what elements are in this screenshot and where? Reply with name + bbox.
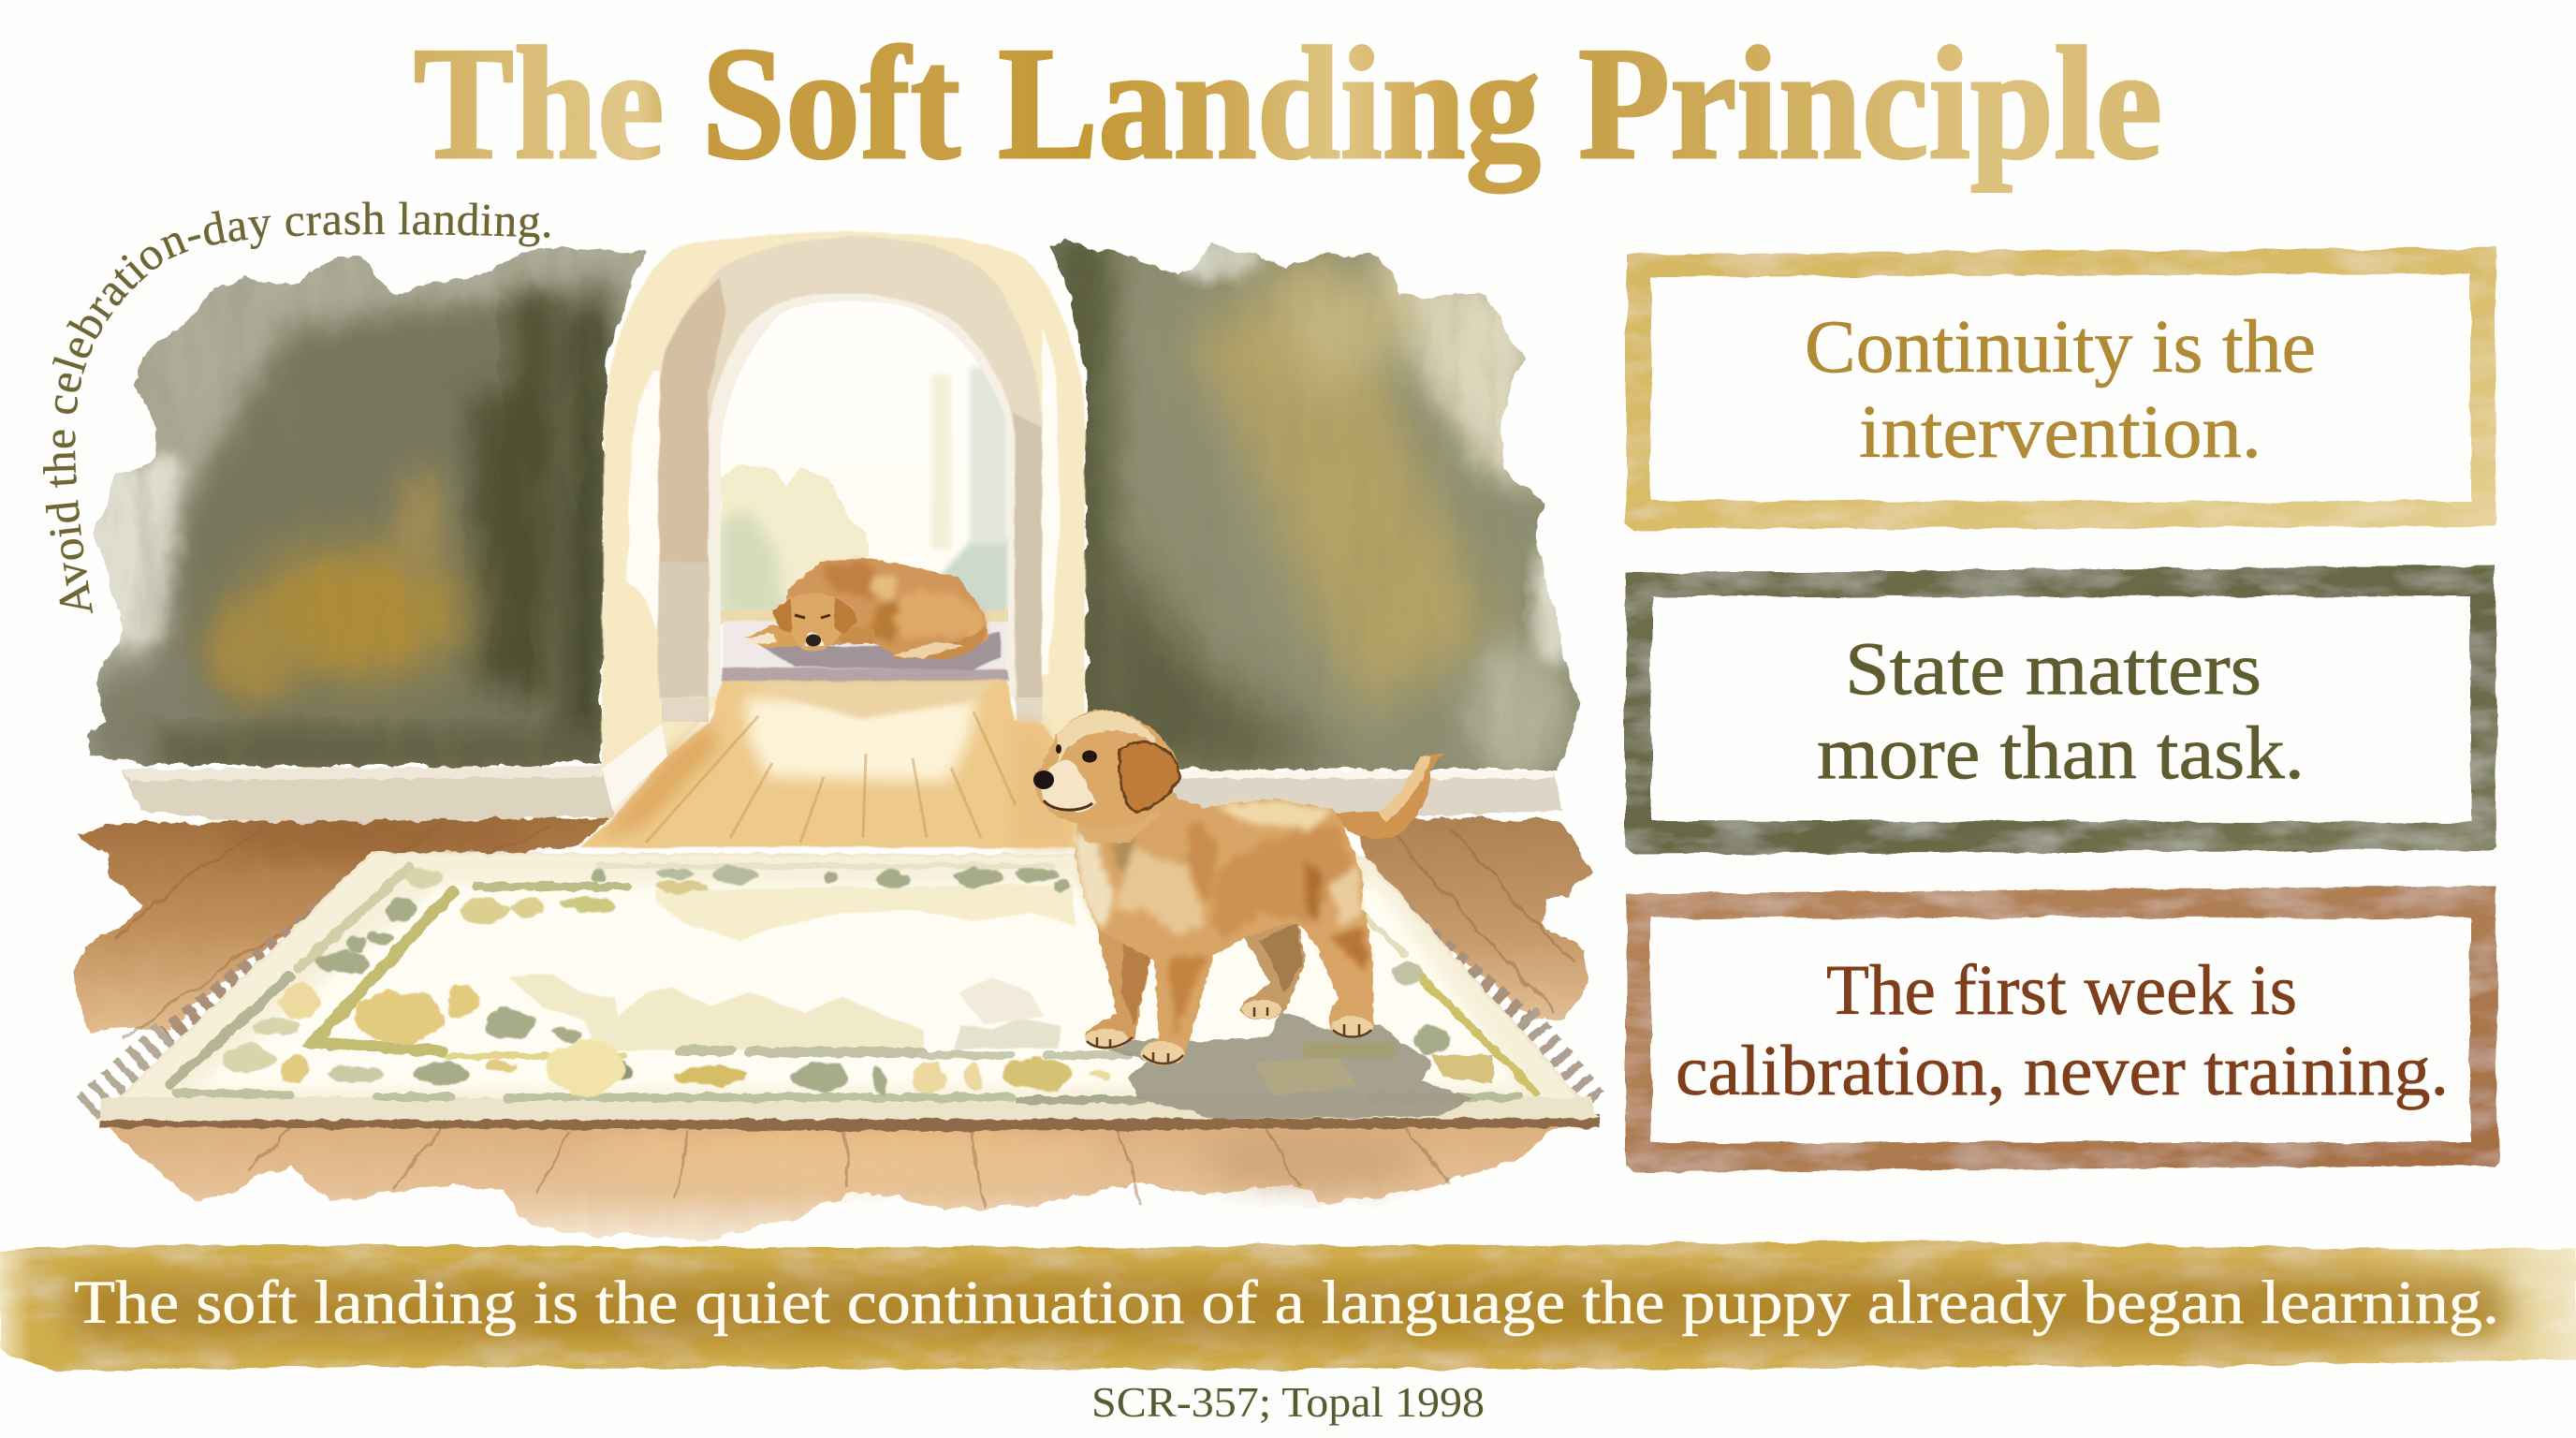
banner wash: [0, 1241, 2576, 1371]
sleeping dog markings: [824, 562, 987, 641]
far legs: [1086, 913, 1306, 1048]
illustration: watercolor room with two puppies: [73, 225, 1601, 1239]
near front leg: [1140, 950, 1214, 1065]
rug fringe: [80, 866, 1593, 1114]
panel text line 2: more than task.: [1817, 712, 2305, 795]
curved caption: Avoid the celebration-day crash landing.: [43, 201, 550, 614]
rug border lines: [170, 866, 1537, 1100]
frame: gold: [1626, 247, 2497, 530]
frame: olive: [1626, 565, 2497, 854]
banner: [0, 1241, 2576, 1371]
banner text: The soft landing is the quiet continuation of a language the puppy already began learning.: [74, 1269, 2499, 1337]
arch band: [659, 237, 1042, 708]
citation: SCR-357; Topal 1998: [1091, 1378, 1485, 1426]
left jamb skirting: [602, 724, 667, 809]
floor boards: [73, 816, 1601, 1239]
near rear leg: [1287, 885, 1373, 1037]
right baseboard: [1095, 770, 1561, 816]
rug field washes: [507, 885, 1076, 1050]
shadow under standing puppy: [1095, 1011, 1493, 1119]
left wall: [87, 246, 646, 769]
rug underside shadow: [99, 1114, 1599, 1131]
cushion: [723, 622, 1008, 681]
view through doorway: [711, 300, 1020, 683]
ear: [1119, 742, 1179, 813]
sleeping dog body: [787, 558, 988, 657]
panel text line 1: The first week is: [1826, 951, 2297, 1030]
sleeping dog face: [795, 615, 830, 646]
jamb highlights: [625, 328, 1060, 674]
panel text line 1: State matters: [1845, 628, 2261, 711]
panel: continuity: [1626, 247, 2497, 530]
title: The Soft Landing Principle: [414, 15, 2162, 193]
head: [1033, 710, 1179, 843]
paws: [1086, 1000, 1372, 1064]
panel text line 2: intervention.: [1859, 391, 2261, 474]
frame: brown: [1626, 886, 2497, 1172]
rug: [80, 854, 1599, 1131]
fur patches: [1076, 800, 1367, 1034]
tail: [1336, 752, 1443, 839]
standing golden retriever puppy: [1033, 710, 1443, 1065]
panel text line 2: calibration, never training.: [1676, 1032, 2449, 1110]
panel text line 1: Continuity is the: [1805, 306, 2316, 389]
right wall: [1050, 238, 1580, 771]
doorway arch: [602, 232, 1085, 809]
panel: first week: [1626, 886, 2497, 1172]
panel: state: [1626, 565, 2497, 854]
sleeping dog tail and paws: [742, 594, 987, 659]
arch base blocks: [662, 697, 1042, 724]
face: eye, nose, mouth: [1033, 744, 1097, 810]
sleeping dog on cushion: [723, 558, 1008, 681]
hallway floor: [580, 680, 1114, 847]
left baseboard: [122, 766, 613, 820]
rug motifs: [219, 867, 1451, 1096]
rug body: [99, 854, 1596, 1119]
outer arch jamb: [602, 232, 1085, 809]
body: [1075, 749, 1364, 962]
